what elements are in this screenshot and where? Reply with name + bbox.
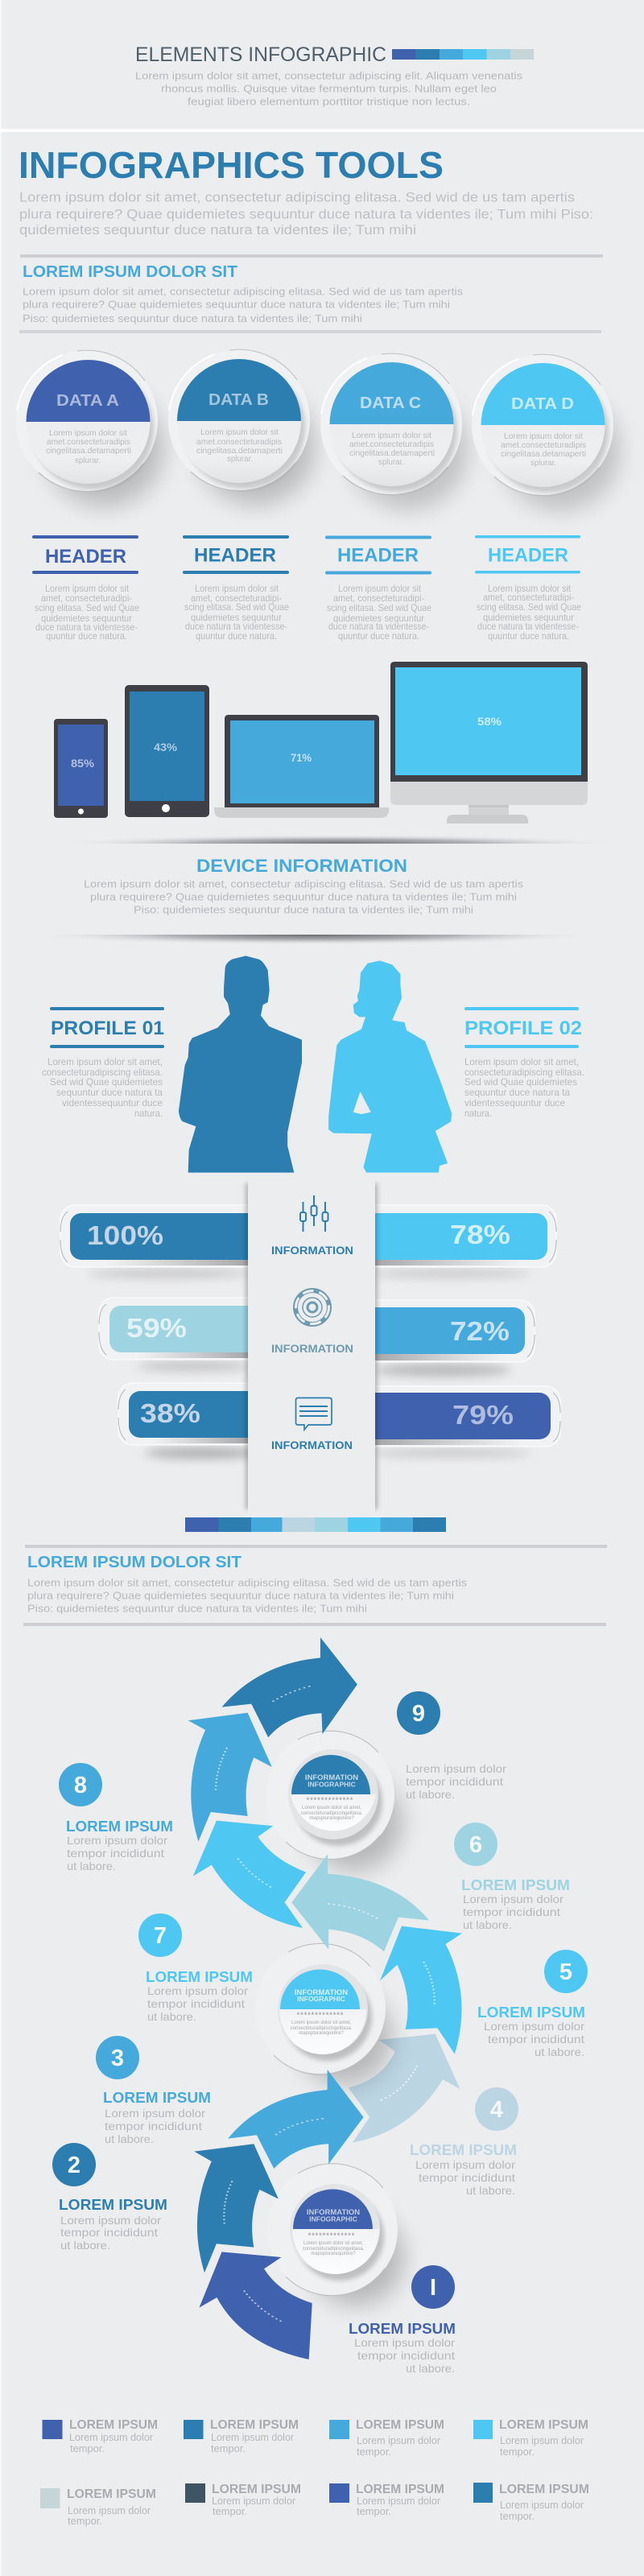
- label: information 2: INFORMATION: [271, 1343, 353, 1355]
- section paragraph 1: plura requirere? Quae quidemietes sequuntur duce natura ta videntes ile; Tum mihi: [23, 298, 450, 311]
- legend item 8: LOREM IPSUM: [499, 2483, 589, 2496]
- disc 3: Lorem ipsum dolor sit amet,: [303, 2241, 363, 2246]
- disc 3: INFORMATION: [307, 2208, 360, 2217]
- disc 3: mapsplurarequirere?: [311, 2252, 356, 2256]
- legend item 2: LOREM IPSUM: [210, 2418, 299, 2432]
- icon: sliders: [300, 1195, 328, 1232]
- disc 2: INFOGRAPHIC: [297, 1995, 345, 2003]
- column: header 3: [325, 536, 431, 642]
- circle: data B: splurar.: [227, 454, 253, 464]
- column: header 2: amet, consecteturadipi-: [191, 592, 282, 604]
- disc 3: *************: [308, 2231, 355, 2240]
- circle: data C: Lorem ipsum dolor sit: [352, 431, 431, 440]
- disc 2: *************: [297, 2011, 344, 2019]
- column: header 2: duce natura ta videntesse-: [185, 621, 287, 632]
- column: header 2: quidemietes sequuntur: [191, 612, 282, 623]
- step 6: 6: [469, 1832, 482, 1858]
- column: header 4: quuntur duce natura.: [488, 630, 569, 642]
- column: header 4: scing elitasa. Sed wid Quae: [477, 601, 581, 613]
- step 3: [96, 2036, 211, 2145]
- colour strip: bottom of panel: [185, 1517, 446, 1532]
- column: header 3: amet, consecteturadipi-: [333, 592, 424, 604]
- column: header 1: amet, consecteturadipi-: [41, 592, 132, 604]
- section paragraph 1: Piso: quidemietes sequuntur duce natura ta videntes ile; Tum mihi: [23, 312, 362, 324]
- legend item 3: Lorem ipsum dolor: [357, 2434, 441, 2446]
- profile 02: videntessequuntur duce: [464, 1097, 565, 1108]
- step 4: 4: [490, 2097, 503, 2123]
- title paragraph: Lorem ipsum dolor sit amet, consectetur adipiscing elitasa. Sed wid de us tam apertis: [19, 190, 575, 204]
- step 5: tempor incididunt: [488, 2033, 584, 2046]
- legend item 8: tempor.: [500, 2510, 535, 2522]
- step 1: [349, 2265, 456, 2375]
- profile 02: sequuntur duce natura ta: [464, 1087, 570, 1098]
- step 9: [397, 1691, 506, 1801]
- profile 02: Lorem ipsum dolor sit amet,: [464, 1056, 579, 1067]
- legend item 6: Lorem ipsum dolor: [212, 2495, 296, 2507]
- profile section: [42, 956, 584, 1173]
- device: tablet: [125, 685, 209, 817]
- column: header 4: duce natura ta videntesse-: [477, 621, 579, 632]
- heading: elements infographic: ELEMENTS INFOGRAPHIC: [135, 43, 386, 66]
- column: header 4: Lorem ipsum dolor sit: [488, 583, 572, 594]
- column: header 4: HEADER: [488, 544, 568, 567]
- intro paragraph: [135, 69, 523, 108]
- step 9: Lorem ipsum dolor: [406, 1762, 506, 1775]
- step 5: ut labore.: [535, 2046, 584, 2058]
- legend item 2: tempor.: [211, 2442, 246, 2454]
- step 8: [59, 1763, 173, 1872]
- bar: 100%: 100%: [87, 1220, 163, 1250]
- arrow 9: [222, 1637, 357, 1737]
- section paragraph 2: plura requirere? Quae quidemietes sequuntur duce natura ta videntes ile; Tum mihi: [27, 1589, 454, 1602]
- profile 01: sequuntur duce natura ta: [56, 1087, 163, 1098]
- step 1: tempor incididunt: [357, 2349, 455, 2362]
- disc 2: consecteturadipiscingelitasa.: [291, 2026, 353, 2031]
- device: desktop monitor: 58%: [477, 715, 502, 728]
- silhouette: man: [179, 956, 302, 1173]
- bar: 72%: 72%: [450, 1316, 510, 1346]
- device: tablet: 43%: [154, 741, 178, 753]
- circle: data D: [472, 354, 620, 510]
- step 8: tempor incididunt: [67, 1847, 164, 1860]
- step 4: [410, 2087, 518, 2197]
- step 4: LOREM IPSUM: [410, 2142, 517, 2158]
- step 6: ut labore.: [463, 1918, 512, 1931]
- label: information 3: INFORMATION: [271, 1439, 353, 1451]
- arrow 7: [193, 1821, 306, 1928]
- top header: [135, 43, 534, 108]
- device paragraph: Lorem ipsum dolor sit amet, consectetur adipiscing elitasa. Sed wid de us tam apertis: [84, 877, 524, 890]
- arrow 6: [291, 1854, 429, 1951]
- step 7: [138, 1913, 253, 2023]
- step 2: LOREM IPSUM: [59, 2197, 167, 2213]
- step 4: ut labore.: [466, 2184, 515, 2197]
- legend item 3: LOREM IPSUM: [356, 2418, 444, 2432]
- circle: data C: amet.consecteturadipis: [349, 440, 434, 449]
- device information: [84, 856, 524, 916]
- column: header 3: scing elitasa. Sed wid Quae: [327, 602, 431, 613]
- profile 01: Sed wid Quae quidemietes: [50, 1076, 163, 1088]
- step 8: LOREM IPSUM: [66, 1818, 173, 1835]
- profile 02: [464, 1007, 584, 1119]
- column: header 3: quuntur duce natura.: [338, 630, 419, 642]
- step 1: LOREM IPSUM: [349, 2321, 456, 2337]
- circle: data C: cingelitasa.detamaperti: [349, 448, 435, 458]
- legend item 5: LOREM IPSUM: [67, 2487, 156, 2501]
- step 6: tempor incididunt: [463, 1905, 560, 1918]
- legend item 8: [473, 2483, 589, 2522]
- disc 1: INFOGRAPHIC: [308, 1781, 356, 1789]
- label: information 1: INFORMATION: [271, 1245, 353, 1257]
- circle: data A: amet.consecteturadipis: [47, 437, 130, 447]
- circle: data D: amet.consecteturadipis: [501, 440, 586, 450]
- legend item 5: tempor.: [68, 2515, 102, 2527]
- column: header 1: Lorem ipsum dolor sit: [45, 583, 130, 594]
- title paragraph: plura requirere? Quae quidemietes sequuntur duce natura ta videntes ile; Tum mihi Piso:: [19, 206, 593, 222]
- circle: data D: Lorem ipsum dolor sit: [504, 431, 583, 441]
- legend item 6: tempor.: [213, 2505, 247, 2517]
- profile 01: PROFILE 01: [51, 1018, 164, 1039]
- column: header 2: scing elitasa. Sed wid Quae: [184, 601, 289, 613]
- step 5: [477, 1950, 588, 2058]
- arrow 2: [194, 2144, 279, 2273]
- column: header 4: [475, 535, 581, 642]
- column: header 1: quidemietes sequuntur: [41, 613, 132, 624]
- device paragraph: plura requirere? Quae quidemietes sequuntur duce natura ta videntes ile; Tum mihi: [90, 890, 517, 903]
- step 3: 3: [111, 2046, 124, 2071]
- profile 02: PROFILE 02: [464, 1018, 582, 1039]
- heading: device information: DEVICE INFORMATION: [196, 856, 407, 876]
- legend item 4: LOREM IPSUM: [499, 2418, 588, 2432]
- circle: data B: amet.consecteturadipis: [196, 437, 282, 447]
- bar: 78%: 78%: [450, 1220, 510, 1249]
- step 9: tempor incididunt: [406, 1775, 503, 1788]
- bar: 72%: [354, 1300, 535, 1362]
- column: header 1: quuntur duce natura.: [46, 630, 127, 642]
- bar: 38%: [118, 1383, 271, 1445]
- arrow 3: [228, 2070, 364, 2169]
- arrow 4: [349, 2034, 460, 2143]
- arrow 8: [188, 1713, 272, 1842]
- legend item 2: [184, 2418, 299, 2454]
- bar: 100%: [60, 1205, 270, 1267]
- legend item 4: tempor.: [500, 2446, 535, 2458]
- profile 02: consecteturadipiscing elitasa.: [464, 1067, 584, 1078]
- section paragraph 1: Lorem ipsum dolor sit amet, consectetur adipiscing elitasa. Sed wid de us tam apertis: [23, 285, 464, 298]
- disc 2: INFORMATION: [295, 1988, 348, 1997]
- legend item 3: [329, 2418, 444, 2458]
- legend item 1: tempor.: [70, 2442, 105, 2454]
- circle: data A: Lorem ipsum dolor sit: [49, 428, 127, 438]
- legend item 4: [473, 2418, 588, 2458]
- disc 2: mapsplurarequirere?: [299, 2031, 344, 2036]
- step 3: ut labore.: [105, 2132, 154, 2145]
- column: header 3: HEADER: [337, 544, 419, 567]
- disc 1: mapsplurarequirere?: [309, 1816, 354, 1821]
- disc 3: [267, 2164, 404, 2306]
- data circles: [16, 349, 620, 510]
- column: header 1: [32, 535, 139, 642]
- column: header 4: quidemietes sequuntur: [483, 612, 574, 623]
- step 5: Lorem ipsum dolor: [484, 2020, 584, 2033]
- circle: data C: DATA C: [360, 394, 421, 412]
- legend item 6: [185, 2483, 301, 2517]
- silhouette: woman: [328, 960, 452, 1173]
- circle: data B: cingelitasa.detamaperti: [196, 446, 283, 456]
- devices: [54, 662, 588, 824]
- arrow 5: [380, 1926, 462, 2054]
- intro paragraph: feugiat libero elementum porttitor tristique non lectus.: [188, 95, 470, 108]
- circle: data B: [168, 349, 316, 506]
- device paragraph: Piso: quidemietes sequuntur duce natura ta videntes ile; Tum mihi: [134, 903, 473, 916]
- disc 3: INFOGRAPHIC: [309, 2215, 357, 2223]
- circle: data A: splurar.: [75, 456, 101, 465]
- bar: 38%: 38%: [140, 1398, 200, 1428]
- step 9: 9: [412, 1701, 425, 1727]
- column: header 2: HEADER: [194, 544, 276, 567]
- center information panel: [246, 1173, 378, 1519]
- bar: 59%: [99, 1298, 270, 1360]
- bar: 59%: 59%: [126, 1313, 187, 1343]
- profile 01: consecteturadipiscing elitasa.: [42, 1067, 163, 1078]
- disc 3: consecteturadipiscingelitasa.: [303, 2247, 365, 2252]
- circle: data C: [320, 353, 468, 510]
- step 2: 2: [68, 2153, 80, 2178]
- arrow 1: [199, 2252, 312, 2359]
- circle: data D: splurar.: [530, 458, 556, 468]
- column: header 2: quuntur duce natura.: [196, 630, 277, 642]
- step 6: Lorem ipsum dolor: [463, 1893, 564, 1905]
- step 2: ut labore.: [60, 2239, 110, 2252]
- column: header 2: Lorem ipsum dolor sit: [195, 583, 279, 594]
- step 2: Lorem ipsum dolor: [60, 2214, 161, 2227]
- step 6: LOREM IPSUM: [461, 1877, 570, 1893]
- step 1: ut labore.: [406, 2362, 455, 2375]
- step 5: LOREM IPSUM: [477, 2004, 585, 2021]
- circle: data D: cingelitasa.detamaperti: [501, 449, 586, 459]
- circle: data D: DATA D: [511, 394, 574, 413]
- step 7: ut labore.: [147, 2010, 196, 2023]
- disc 1: [266, 1731, 402, 1871]
- circle: data C: splurar.: [378, 457, 404, 467]
- device: phone: [54, 719, 108, 818]
- device: desktop monitor: [390, 662, 588, 824]
- percentage bars: [60, 1205, 560, 1459]
- section heading 2: LOREM IPSUM DOLOR SIT: [27, 1554, 242, 1571]
- icon: wheel: [295, 1290, 329, 1324]
- step 3: LOREM IPSUM: [103, 2090, 211, 2106]
- legend: [40, 2418, 589, 2527]
- circle: data B: DATA B: [208, 390, 269, 409]
- device: phone: 85%: [71, 757, 95, 770]
- step 3: tempor incididunt: [105, 2120, 202, 2132]
- disc 1: consecteturadipiscingelitasa.: [301, 1811, 363, 1816]
- circle: data A: cingelitasa.detamaperti: [46, 446, 131, 456]
- legend item 5: Lorem ipsum dolor: [68, 2504, 151, 2516]
- legend item 5: [40, 2487, 156, 2527]
- section paragraph 2: Piso: quidemietes sequuntur duce natura ta videntes ile; Tum mihi: [27, 1602, 367, 1615]
- legend item 3: tempor.: [357, 2446, 391, 2458]
- step 8: 8: [74, 1773, 87, 1798]
- title: INFOGRAPHICS TOOLS: [19, 144, 444, 186]
- colour strip: [392, 49, 534, 60]
- profile 01: [42, 1007, 164, 1119]
- disc 2: [255, 1943, 392, 2085]
- disc 1: INFORMATION: [305, 1773, 358, 1782]
- legend item 7: Lorem ipsum dolor: [357, 2495, 441, 2507]
- column: header 4: amet, consecteturadipi-: [483, 592, 574, 603]
- profile 01: natura.: [134, 1108, 163, 1119]
- device paragraph: [84, 877, 524, 916]
- step 2: tempor incididunt: [60, 2226, 158, 2239]
- legend item 1: [42, 2418, 158, 2454]
- circle: data A: DATA A: [56, 391, 119, 410]
- section heading 1: LOREM IPSUM DOLOR SIT: [23, 263, 237, 281]
- disc 1: Lorem ipsum dolor sit amet,: [302, 1806, 361, 1810]
- step 7: LOREM IPSUM: [146, 1969, 253, 1985]
- bar shadows: [89, 1269, 531, 1459]
- bar: 79%: [354, 1386, 560, 1447]
- legend item 7: tempor.: [357, 2505, 391, 2517]
- profile 01: Lorem ipsum dolor sit amet,: [47, 1056, 163, 1067]
- step 6: [454, 1823, 570, 1931]
- step 8: ut labore.: [67, 1860, 116, 1872]
- intro paragraph: Lorem ipsum dolor sit amet, consectetur adipiscing elit. Aliquam venenatis: [135, 69, 523, 82]
- disc 2: Lorem ipsum dolor sit amet,: [291, 2021, 351, 2025]
- legend item 8: Lorem ipsum dolor: [500, 2499, 584, 2511]
- icon: speech bubble: [296, 1397, 332, 1430]
- device: laptop: [214, 715, 389, 818]
- profile 01: videntessequuntur duce: [62, 1097, 163, 1108]
- step 5: 5: [559, 1959, 572, 1985]
- disc 1: *************: [307, 1796, 353, 1804]
- step 4: tempor incididunt: [419, 2171, 515, 2184]
- legend item 6: LOREM IPSUM: [212, 2483, 301, 2496]
- bar: 78%: [354, 1205, 556, 1267]
- circle: data B: Lorem ipsum dolor sit: [200, 427, 279, 437]
- legend item 7: LOREM IPSUM: [356, 2483, 444, 2496]
- title paragraph: [19, 190, 593, 237]
- step 7: tempor incididunt: [147, 1997, 245, 2010]
- intro paragraph: rhoncus mollis. Quisque vitae fermentum turpis. Nullam eget leo: [161, 82, 497, 95]
- step 7: Lorem ipsum dolor: [147, 1984, 248, 1997]
- main title block: [19, 144, 593, 237]
- legend item 2: Lorem ipsum dolor: [211, 2431, 295, 2443]
- column: header 1: duce natura ta videntesse-: [35, 621, 138, 633]
- section paragraph 2: Lorem ipsum dolor sit amet, consectetur adipiscing elitasa. Sed wid de us tam apertis: [27, 1576, 468, 1589]
- profile 02: natura.: [464, 1108, 492, 1119]
- profile 02: Sed wid Quae quidemietes: [464, 1076, 577, 1088]
- header columns: [32, 535, 581, 642]
- column: header 1: scing elitasa. Sed wid Quae: [35, 602, 139, 613]
- step 3: Lorem ipsum dolor: [105, 2107, 205, 2120]
- section paragraph 2: [27, 1576, 468, 1615]
- title paragraph: quidemietes sequuntur duce natura ta videntes ile; Tum mihi: [19, 222, 416, 237]
- column: header 3: quidemietes sequuntur: [333, 613, 424, 624]
- legend item 7: [329, 2483, 444, 2517]
- column: header 3: duce natura ta videntesse-: [328, 621, 429, 632]
- column: header 3: Lorem ipsum dolor sit: [338, 583, 422, 594]
- step 2: [52, 2143, 167, 2252]
- step 7: 7: [154, 1923, 167, 1949]
- step 1: I: [430, 2275, 436, 2301]
- legend item 1: LOREM IPSUM: [69, 2418, 158, 2432]
- step 1: Lorem ipsum dolor: [354, 2336, 455, 2349]
- circle: data A: [16, 350, 164, 507]
- section paragraph 1: [23, 285, 464, 324]
- bar: 79%: 79%: [452, 1400, 514, 1430]
- legend item 4: Lorem ipsum dolor: [500, 2434, 584, 2446]
- legend item 1: Lorem ipsum dolor: [69, 2431, 154, 2443]
- step 9: ut labore.: [406, 1788, 455, 1801]
- column: header 2: [183, 535, 289, 642]
- step 4: Lorem ipsum dolor: [415, 2158, 515, 2171]
- step 8: Lorem ipsum dolor: [67, 1834, 167, 1847]
- column: header 1: HEADER: [45, 546, 126, 568]
- device: laptop: 71%: [291, 751, 312, 764]
